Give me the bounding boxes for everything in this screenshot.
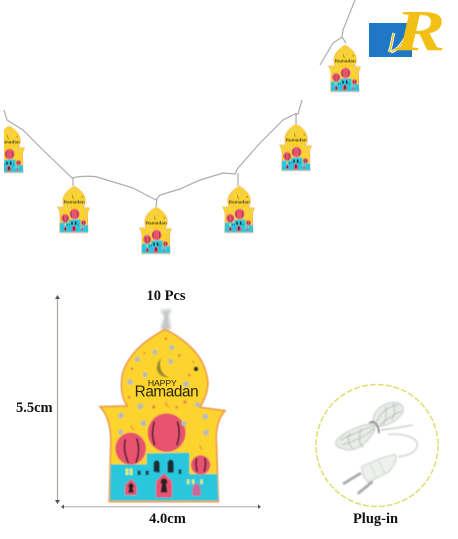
plug body [362, 454, 396, 482]
plug and coiled cable [336, 402, 417, 493]
cable band [369, 422, 379, 433]
cord [380, 425, 417, 457]
width dimension arrow [61, 504, 261, 509]
greeting text: HAPPY [148, 378, 177, 388]
lantern 5 [279, 124, 312, 171]
lantern body [100, 329, 225, 502]
height dimension arrow [55, 295, 60, 504]
lantern 6 [328, 45, 361, 92]
lantern 1 (cropped) [4, 125, 25, 174]
lantern 4 [222, 186, 255, 233]
lantern 3: Ramadan [146, 220, 167, 226]
light string wire [4, 0, 355, 207]
lantern 2: Ramadan [64, 199, 85, 205]
label: width: 4.0cm [149, 511, 186, 527]
hanging loop [161, 309, 171, 329]
cable coil [336, 402, 403, 450]
lantern 3 [139, 207, 172, 254]
label: quantity: 10 Pcs [146, 288, 186, 304]
logo: R [394, 0, 445, 63]
lantern 2 [57, 186, 90, 233]
plug pins [344, 474, 372, 493]
label: plug-in: Plug-in [353, 511, 398, 527]
large lantern [100, 309, 225, 502]
logo [369, 0, 445, 63]
label: height: 5.5cm [16, 400, 53, 416]
greeting text: Ramadan [135, 383, 199, 400]
lantern 5: Ramadan [286, 137, 307, 143]
plug-in circle [316, 384, 438, 506]
lantern 4: Ramadan [229, 199, 250, 205]
lantern 6: Ramadan [335, 58, 356, 64]
